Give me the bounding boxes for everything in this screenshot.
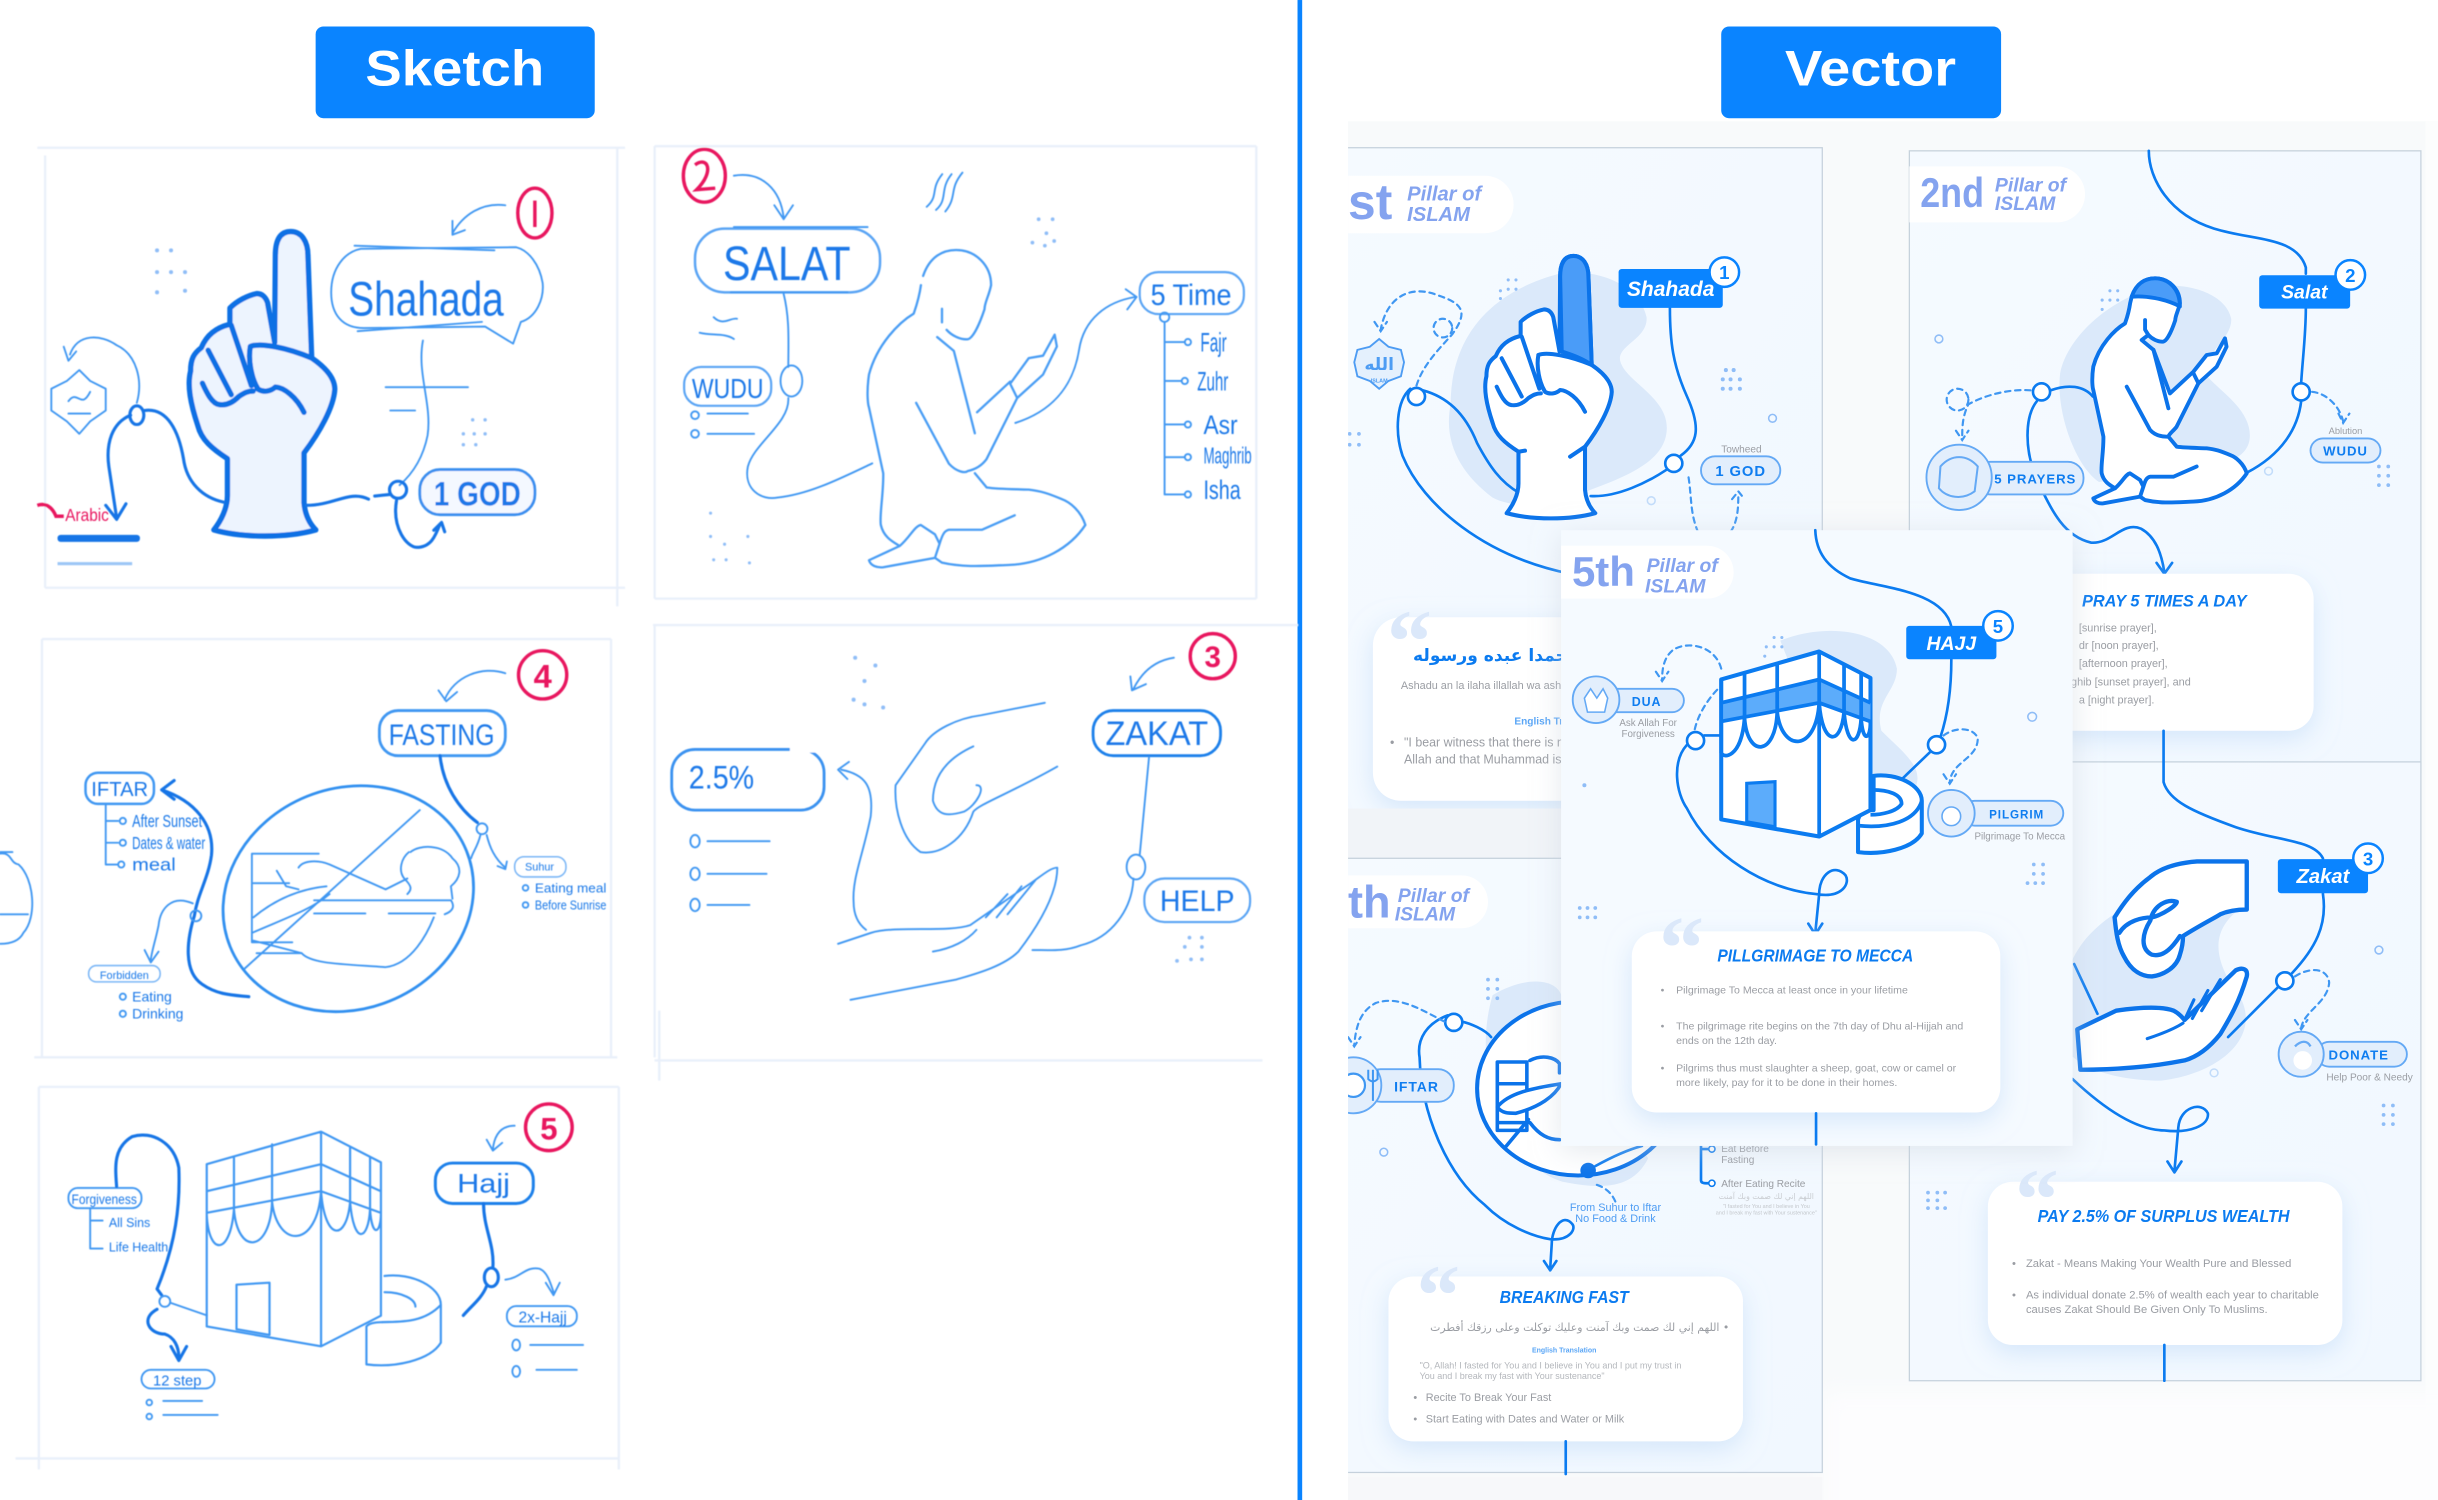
button: Vector heading	[1721, 26, 2001, 118]
12 step list	[141, 1309, 218, 1419]
number 4 badge: 4	[534, 657, 552, 694]
illustration: praying man sketch	[868, 250, 1085, 567]
pill: 5th pillar of Islam title: Pillar of	[1647, 555, 1720, 577]
icon: Allah badge: ISLAM	[1371, 379, 1388, 385]
button: Sketch heading	[316, 26, 595, 118]
illustration: Kaaba	[1721, 652, 1922, 853]
label: WUDU pill: Ablution	[2329, 426, 2362, 436]
card: Breaking Fast: Recite To Break Your Fast	[1426, 1392, 1551, 1404]
quote card: Shahada testimony: “	[1387, 592, 1432, 692]
number 3 badge	[1130, 634, 1235, 690]
callout: Shahada bubble	[331, 246, 543, 344]
panel: 4th pillar Fasting	[1325, 858, 1822, 1474]
card: Breaking Fast: •	[1413, 1392, 1417, 1404]
5 Time list: Maghrib	[1203, 442, 1252, 468]
card: Breaking Fast	[1388, 1247, 1743, 1474]
list: eat before fasting	[1701, 1144, 1817, 1216]
quote card: Shahada testimony	[1365, 612, 1562, 808]
ZAKAT label: ZAKAT	[1105, 715, 1208, 753]
dots	[1935, 289, 2390, 487]
button: Vector heading: Vector	[1785, 41, 1956, 97]
SALAT label: SALAT	[723, 237, 851, 291]
card: Pray 5 times a day: ghib [sunset prayer], and	[2071, 677, 2191, 689]
card: Breaking Fast: اللهم إني لك صمت وبك آمنت وعليك توكلت وعلى رزقك أفطرت •	[1430, 1320, 1729, 1334]
panel: sketch 1 Shahada	[37, 148, 625, 606]
card: Pay 2.5% of surplus wealth	[1988, 1150, 2342, 1381]
5 Time list	[1015, 272, 1252, 505]
icon: Allah badge	[1354, 339, 1404, 389]
SALAT label	[695, 227, 880, 292]
pill: 4th pillar of Islam title: th	[1348, 876, 1391, 927]
card: Breaking Fast: "O, Allah! I fasted for You and I believe in You and I put my trust in	[1420, 1360, 1681, 1370]
list: eat before fasting: Eat Before	[1721, 1144, 1769, 1155]
icon: sketch raised hand	[189, 232, 335, 536]
card: Pilgrimage to Mecca: Pilgrimage To Mecca at least once in your lifetime	[1676, 985, 1908, 997]
label: Arabic note	[37, 505, 140, 565]
Suhur label: Before Sunrise	[535, 899, 606, 913]
pill: 2nd pillar of Islam title: 2nd	[1920, 169, 1984, 216]
card: Pilgrimage to Mecca: •	[1661, 985, 1665, 997]
dots	[155, 248, 487, 446]
sketch connector lines	[64, 337, 468, 547]
card: Pay 2.5% of surplus wealth: As individual donate 2.5% of wealth each year to charitable	[2026, 1289, 2319, 1301]
label: Pilgrim pill: PILGRIM	[1989, 809, 2044, 822]
label: 5 prayers pill	[1926, 445, 2083, 510]
card: Pray 5 times a day: [sunrise prayer],	[2079, 622, 2157, 634]
caption: from Suhur to Iftar	[1570, 1203, 1661, 1222]
illustration: no-food circle sketch	[189, 749, 508, 1049]
pill: 2nd pillar of Islam title: ISLAM	[1995, 193, 2056, 215]
card: Pilgrimage to Mecca: Pilgrims thus must slaughter a sheep, goat, cow or camel or	[1676, 1062, 1957, 1074]
label: Zakat: 3	[2363, 848, 2373, 869]
dots	[1578, 636, 2045, 919]
pill: 1st pillar of Islam title: Pillar of	[1407, 184, 1484, 206]
label: Dua pill	[1573, 676, 1684, 740]
pill: 1st pillar of Islam title: st	[1348, 174, 1392, 230]
label: HAJJ: HAJJ	[1927, 633, 1977, 655]
panel: 5th pillar Hajj	[1561, 530, 2073, 1146]
connector lines	[1656, 530, 1978, 934]
card: Pay 2.5% of surplus wealth: •	[2012, 1258, 2016, 1270]
panel: sketch 3 Zakat	[653, 625, 1298, 1081]
card: Pilgrimage to Mecca: •	[1661, 1062, 1665, 1074]
quote card: Shahada testimony: English Translation	[1514, 717, 1608, 728]
label: Pilgrim pill: Pilgrimage To Mecca	[1974, 832, 2066, 843]
Forgiveness list left: Forgiveness	[72, 1191, 137, 1207]
number 1 badge	[452, 188, 552, 238]
card: Pay 2.5% of surplus wealth: Zakat - Means Making Your Wealth Pure and Blessed	[2026, 1258, 2291, 1270]
label: WUDU pill	[2311, 426, 2380, 463]
list: eat before fasting: After Eating Recite	[1721, 1179, 1806, 1190]
label: Dua pill: Ask Allah For	[1619, 718, 1678, 729]
card: Pray 5 times a day	[1990, 574, 2314, 731]
card: Pay 2.5% of surplus wealth: •	[2012, 1289, 2016, 1301]
number 2 badge	[683, 149, 793, 219]
label: 1 GOD pill	[1701, 444, 1780, 484]
card: Pray 5 times a day: dr [noon prayer],	[2079, 640, 2159, 652]
card: Pray 5 times a day: PRAY 5 TIMES A DAY	[2082, 592, 2249, 610]
Forgiveness list left	[68, 1135, 207, 1315]
illustration: Kaaba sketch	[207, 1132, 441, 1365]
card: Pilgrimage to Mecca: •	[1661, 1020, 1665, 1032]
label: Salat	[2259, 260, 2365, 309]
2.5% label and list: 2.5%	[689, 758, 754, 795]
label: IFTAR pill	[1348, 1056, 1455, 1114]
steam sketch	[700, 173, 962, 339]
card: Pay 2.5% of surplus wealth: causes Zakat Should Be Given Only To Muslims.	[2026, 1304, 2268, 1316]
pill: 5th pillar of Islam title: ISLAM	[1645, 575, 1706, 597]
label: Salat: 2	[2345, 265, 2355, 286]
pill: 4th pillar of Islam title: ISLAM	[1395, 903, 1456, 925]
label: Arabic note: Arabic	[65, 506, 109, 525]
Forgiveness list left: Life Health	[109, 1241, 168, 1255]
quote card: Shahada testimony: محمدا عبده ورسوله	[1413, 646, 1578, 666]
blob	[2055, 896, 2246, 1081]
number 4 badge	[438, 651, 567, 701]
card: Pay 2.5% of surplus wealth: PAY 2.5% OF SURPLUS WEALTH	[2038, 1207, 2290, 1226]
label: WUDU pill: WUDU	[2323, 444, 2368, 459]
quote card: Shahada testimony: Allah and that Muhammad is His	[1404, 752, 1583, 766]
FASTING label: FASTING	[389, 719, 494, 752]
number 5 badge	[487, 1104, 572, 1151]
icon: neighbouring hand fragment	[0, 852, 32, 944]
label: IFTAR pill: IFTAR	[1394, 1079, 1439, 1095]
divider between sketch and vector	[1298, 0, 1302, 1500]
callout: Shahada bubble: Shahada	[348, 273, 504, 327]
card: Pilgrimage to Mecca: ends on the 12th day.	[1676, 1035, 1777, 1047]
WUDU label and connectors	[684, 294, 872, 498]
quote card: Shahada testimony: Ashadu an la ilaha illallah wa ashadu	[1401, 680, 1579, 692]
card: Breaking Fast: You and I break my fast with Your sustenance"	[1420, 1371, 1605, 1381]
panel: sketch 5 Hajj	[16, 1087, 619, 1469]
card: Pilgrimage to Mecca: PILLGRIMAGE TO MECCA	[1717, 946, 1913, 966]
list: eat before fasting: "I fasted for You and I believe in You	[1723, 1204, 1810, 1210]
label: 1 GOD pill: 1 GOD	[1715, 464, 1766, 480]
Forbidden label	[89, 901, 193, 1021]
Forbidden label: Eating	[132, 988, 172, 1004]
illustration: praying man	[2092, 278, 2247, 503]
pill: 5th pillar of Islam title	[1561, 546, 1734, 599]
5 Time list: Fajr	[1200, 327, 1227, 357]
shade band between 1st and 4th panels	[1348, 809, 1561, 865]
dots	[709, 217, 1056, 564]
pill: 5th pillar of Islam title: 5th	[1572, 548, 1635, 595]
card: Pay 2.5% of surplus wealth: “	[2015, 1150, 2059, 1247]
connector lines	[2073, 731, 2329, 1172]
label: Zakat	[2278, 844, 2383, 893]
Iftar label and list: After Sunset	[132, 812, 202, 831]
Hajj label	[435, 1163, 560, 1315]
button: Sketch heading: Sketch	[365, 41, 544, 97]
pill: 4th pillar of Islam title	[1348, 875, 1488, 928]
WUDU label and connectors: WUDU	[692, 373, 763, 404]
list: eat before fasting: اللهم إني لك صمت وبك آمنت	[1719, 1191, 1814, 1201]
Pilgrim list right: 2x-Hajj	[518, 1309, 567, 1326]
label: Donate pill	[2279, 1032, 2414, 1084]
Iftar label and list	[86, 773, 249, 997]
list: eat before fasting: Fasting	[1721, 1155, 1754, 1166]
Suhur label	[440, 756, 606, 913]
label: Donate pill: Help Poor & Needy	[2326, 1073, 2414, 1084]
vector section background	[1348, 121, 2438, 1500]
list: eat before fasting: and I break my fast with Your sustenance"	[1716, 1210, 1817, 1216]
label: Shahada: 1	[1719, 262, 1730, 283]
illustration: giving and receiving hands	[2077, 861, 2247, 1070]
1 GOD label: 1 GOD	[434, 475, 521, 513]
illustration: giving hands sketch	[838, 703, 1057, 1000]
label: 1 GOD pill: Towheed	[1721, 444, 1762, 455]
quote card: Shahada testimony: "I bear witness that there is no god but	[1404, 735, 1616, 749]
pill: 4th pillar of Islam title: Pillar of	[1398, 885, 1472, 907]
Forgiveness list left: All Sins	[109, 1216, 150, 1230]
panel: 2nd pillar Salat	[1909, 151, 2421, 773]
pill: 1st pillar of Islam title: ISLAM	[1407, 204, 1471, 226]
label: Dua pill: DUA	[1632, 695, 1661, 709]
Iftar label and list: IFTAR	[91, 779, 148, 801]
dots	[1926, 946, 2395, 1210]
Forbidden label: Drinking	[132, 1005, 183, 1021]
card: Pray 5 times a day: a [night prayer].	[2079, 695, 2154, 707]
number 3 badge: 3	[1205, 641, 1221, 674]
pill: 2nd pillar of Islam title	[1909, 166, 2085, 222]
card: Pilgrimage to Mecca	[1632, 898, 2000, 1144]
label: Shahada	[1619, 257, 1739, 308]
panel: 1st pillar Shahada	[1348, 147, 1823, 808]
5 Time list: Asr	[1203, 410, 1238, 440]
2.5% label and list	[672, 737, 830, 911]
pill: 1st pillar of Islam title	[1348, 174, 1514, 233]
panel: sketch 4 Fasting	[0, 639, 617, 1057]
label: 5 prayers pill: 5 PRAYERS	[1994, 472, 2076, 487]
panel: sketch 2 Salat	[655, 146, 1256, 599]
label: Shahada: Shahada	[1627, 278, 1715, 301]
illustration: fasting circle with table	[1477, 1001, 1679, 1175]
dots	[852, 656, 1204, 963]
caption: from Suhur to Iftar: No Food & Drink	[1575, 1213, 1656, 1225]
FASTING label	[379, 711, 505, 756]
card: Breaking Fast: English Translation	[1532, 1348, 1596, 1355]
pill: 2nd pillar of Islam title: Pillar of	[1995, 174, 2069, 196]
card: Pilgrimage to Mecca: “	[1659, 898, 1704, 998]
5 Time list: Isha	[1203, 475, 1241, 505]
label: Dua pill: Forgiveness	[1621, 729, 1675, 740]
card: Breaking Fast: Start Eating with Dates and Water or Milk	[1426, 1414, 1625, 1426]
panel: 3rd pillar Zakat	[1909, 731, 2421, 1381]
blob	[1486, 982, 1648, 1186]
dots	[1380, 978, 1499, 1156]
HELP label: HELP	[1160, 885, 1235, 918]
Iftar label and list: Dates & water	[132, 834, 205, 853]
quote card: Shahada testimony: •	[1390, 735, 1394, 749]
5 Time list: 5 Time	[1151, 279, 1231, 312]
blob	[1780, 631, 1917, 793]
card: Pray 5 times a day: [afternoon prayer],	[2079, 658, 2168, 670]
Suhur label: Eating meal	[535, 882, 606, 896]
connector lines	[1348, 1001, 1642, 1270]
icon: Allah badge sketch	[51, 370, 106, 434]
dots	[1348, 278, 1776, 505]
12 step list: 12 step	[153, 1373, 201, 1389]
Suhur label: Suhur	[525, 862, 554, 874]
card: Breaking Fast: BREAKING FAST	[1500, 1288, 1630, 1307]
card: Pilgrimage to Mecca: more likely, pay for it to be done in their homes.	[1676, 1077, 1897, 1089]
label: Salat: Salat	[2281, 282, 2329, 304]
connector lines	[1947, 151, 2349, 574]
HELP label	[1032, 757, 1250, 950]
connector lines	[1374, 291, 1745, 574]
card: Breaking Fast: •	[1413, 1414, 1417, 1426]
label: Donate pill: DONATE	[2329, 1048, 2389, 1063]
number 5 badge: 5	[540, 1112, 558, 1147]
icon: raised index finger hand	[1485, 256, 1612, 518]
label: HAJJ	[1906, 611, 2013, 659]
Forbidden label: Forbidden	[100, 970, 149, 982]
Hajj label: Hajj	[457, 1169, 510, 1199]
label: Zakat: Zakat	[2296, 866, 2351, 888]
Pilgrim list right	[507, 1306, 583, 1377]
Iftar label and list: meal	[132, 856, 176, 875]
label: HAJJ: 5	[1993, 616, 2003, 637]
label: Pilgrim pill	[1928, 790, 2066, 843]
blob	[1449, 273, 1667, 505]
card: Breaking Fast: “	[1416, 1247, 1460, 1344]
5 Time list: Zuhr	[1197, 366, 1228, 396]
caption: from Suhur to Iftar: From Suhur to Iftar	[1570, 1202, 1661, 1214]
blob	[2059, 286, 2250, 482]
card: Pilgrimage to Mecca: The pilgrimage rite begins on the 7th day of Dhu al-Hijjah and	[1676, 1020, 1963, 1032]
icon: Allah badge: الله	[1364, 355, 1394, 374]
